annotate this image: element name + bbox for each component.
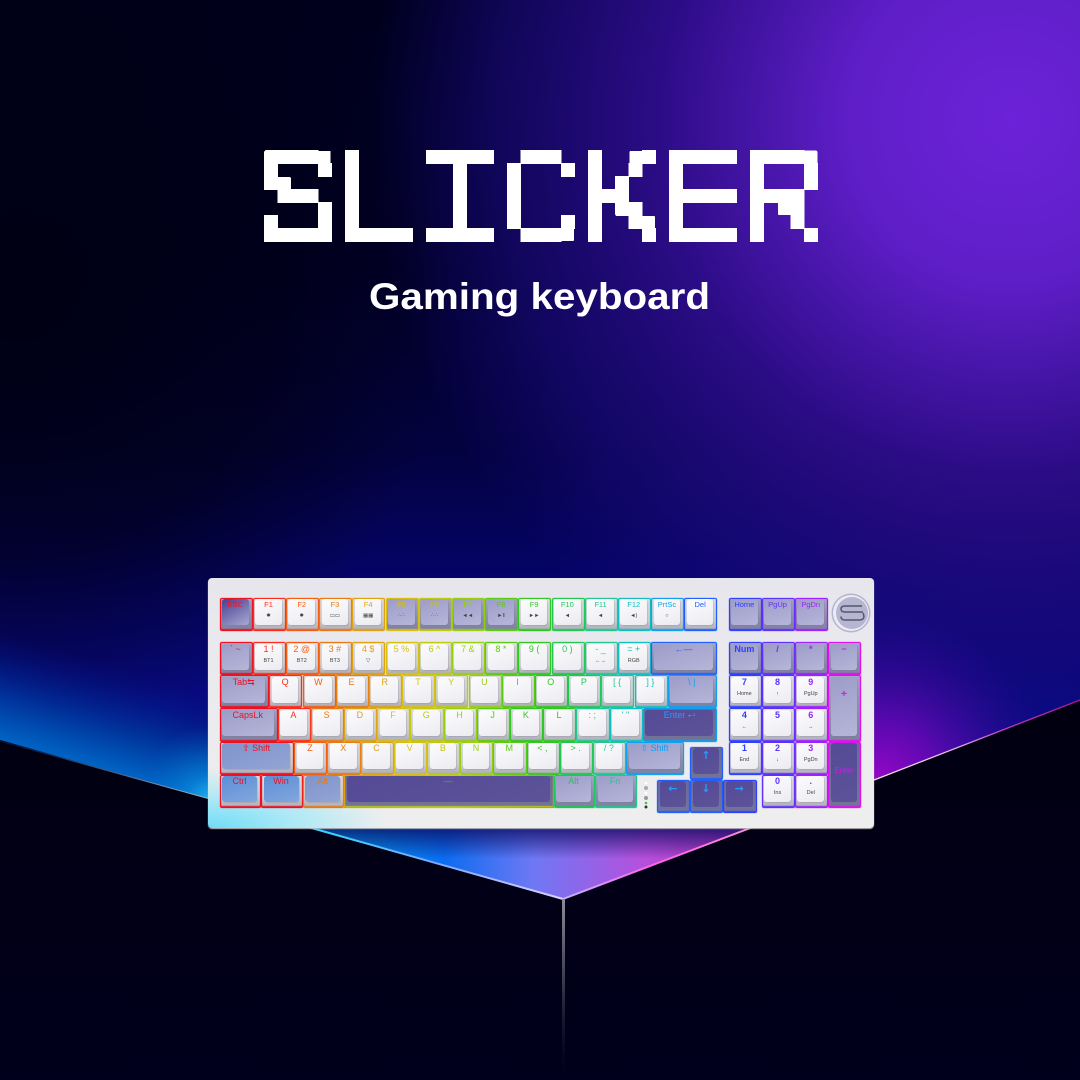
function key row: ◄ <box>598 613 603 619</box>
numeric keypad: 0 <box>775 776 780 786</box>
shift key row: ⇧ Shift <box>640 743 669 753</box>
function key row: ◄ <box>565 613 570 619</box>
number key row: BT1 <box>263 658 274 664</box>
bottom key row <box>219 774 638 809</box>
numeric keypad: 2 <box>775 743 780 753</box>
number key row: 7 & <box>461 644 474 654</box>
number key row: ←— <box>675 644 693 654</box>
home key row: A <box>290 710 296 720</box>
shift key row: X <box>340 743 346 753</box>
home key row: F <box>390 710 396 720</box>
arrow key cluster: ↑ <box>701 749 711 762</box>
number key row: BT3 <box>330 658 340 664</box>
numeric keypad: Num <box>734 644 754 654</box>
shift key row: N <box>473 743 479 753</box>
function key row: ◄) <box>630 613 637 619</box>
number key row: 6 ^ <box>429 644 440 654</box>
home key row: J <box>490 710 495 720</box>
number key row: 1 ! <box>264 644 274 654</box>
function key row: F6 <box>430 600 439 609</box>
number key row: ` ~ <box>230 644 241 654</box>
home key row: G <box>423 710 430 720</box>
QWERTY key row: Tab⇆ <box>233 677 255 687</box>
numeric keypad: Ins <box>774 790 781 796</box>
QWERTY key row: O <box>547 677 554 687</box>
shift key row: ⇧ Shift <box>242 743 270 753</box>
function key row: F3 <box>331 600 339 609</box>
QWERTY key row: Y <box>448 677 454 687</box>
keyboard body <box>208 578 874 828</box>
home key row: L <box>557 710 562 720</box>
shift key row <box>219 742 685 776</box>
function key row: ∴∴ <box>398 613 405 619</box>
number key row: 4 $ <box>362 644 374 654</box>
function key row: F2 <box>297 600 306 609</box>
number key row: 9 ( <box>529 644 539 654</box>
numeric keypad: 5 <box>775 710 780 720</box>
QWERTY key row <box>219 674 718 708</box>
number key row <box>219 641 718 676</box>
QWERTY key row: W <box>314 677 323 687</box>
function key row: PrtSc <box>658 600 676 609</box>
bottom key row: Alt <box>568 776 579 786</box>
QWERTY key row: U <box>481 677 488 687</box>
number key row: 5 % <box>394 644 409 654</box>
shift key row: M <box>505 743 513 753</box>
numeric keypad: − <box>841 644 847 654</box>
function key row: ◄◄ <box>462 613 473 619</box>
home key row: : ; <box>588 710 596 720</box>
QWERTY key row: T <box>415 677 421 687</box>
number key row: 2 @ <box>293 644 310 654</box>
function key row: ∴∴ <box>431 613 438 619</box>
QWERTY key row: R <box>381 677 388 687</box>
numeric keypad: 6 <box>808 710 813 720</box>
title: SLICKER in pixel style: SLICKER <box>255 127 826 286</box>
numeric keypad: Enter <box>834 766 854 775</box>
numeric keypad: ← <box>742 724 747 730</box>
function key row: ►► <box>529 613 540 619</box>
shift key row: C <box>373 743 380 753</box>
QWERTY key row: \ | <box>688 677 696 687</box>
function key row: F10 <box>561 600 574 609</box>
home key row: D <box>357 710 363 720</box>
status indicator lights <box>644 782 648 808</box>
function key row: ESC <box>228 600 243 609</box>
numeric keypad: 3 <box>808 743 813 753</box>
QWERTY key row: [ { <box>613 677 621 687</box>
home key row: H <box>456 710 463 720</box>
numeric keypad: 4 <box>742 710 747 720</box>
number key row: 0 ) <box>562 644 573 654</box>
number key row: 8 * <box>495 644 506 654</box>
number key row: ▽ <box>366 658 370 664</box>
arrow key cluster: ← <box>668 782 677 795</box>
shift key row: Z <box>307 743 313 753</box>
numeric keypad: PgDn <box>804 757 818 763</box>
icon: rotary knob with logo <box>832 594 870 632</box>
function key row: F7 <box>463 600 472 609</box>
shift key row: < , <box>537 743 548 753</box>
shift key row: > . <box>570 743 581 753</box>
number key row: RGB <box>628 658 640 664</box>
function key row: F12 <box>627 600 640 609</box>
function key row: F4 <box>364 600 373 609</box>
shift key row: / ? <box>604 743 614 753</box>
numeric keypad: + <box>841 689 847 700</box>
function key row: ▭▭ <box>330 613 340 619</box>
bottom key row: Fn <box>610 776 620 786</box>
QWERTY key row: P <box>581 677 587 687</box>
numeric keypad: End <box>739 757 749 763</box>
home key row: K <box>523 710 529 720</box>
subtitle: Gaming keyboard: Gaming keyboard <box>369 276 710 317</box>
numeric keypad: ↓ <box>776 757 779 763</box>
numeric keypad: 1 <box>742 743 747 753</box>
function key row: ✹ <box>266 613 271 619</box>
function key row: ▦▦ <box>363 613 373 619</box>
shift key row: B <box>440 743 446 753</box>
arrow key cluster <box>656 746 758 814</box>
numeric keypad: 7 <box>742 677 747 687</box>
function key row: F5 <box>397 600 406 609</box>
numeric keypad: * <box>809 644 812 654</box>
function key row: ►‖ <box>497 613 505 619</box>
numeric keypad: PgUp <box>804 691 818 697</box>
numeric keypad: 8 <box>775 677 780 687</box>
numeric keypad: / <box>776 644 779 654</box>
number key row: BT2 <box>297 658 307 664</box>
function key row: ○ <box>665 613 669 619</box>
arrow key cluster: → <box>735 782 744 795</box>
numeric keypad: ↑ <box>776 691 779 697</box>
navigation key row: Home <box>734 600 754 609</box>
function key row <box>219 597 718 632</box>
number key row: = + <box>627 644 640 654</box>
numeric keypad: Del <box>807 790 815 796</box>
QWERTY key row: E <box>349 677 355 687</box>
home key row: CapsLk <box>233 710 263 720</box>
navigation key row <box>728 597 829 632</box>
bottom key row: Win <box>273 776 289 786</box>
QWERTY key row: ] } <box>646 677 654 687</box>
bottom key row: Ctrl <box>232 776 246 786</box>
arrow key cluster: ↓ <box>701 782 711 795</box>
function key row: F1 <box>264 600 273 609</box>
bottom key row: Alt <box>317 776 328 786</box>
home key row: S <box>324 710 330 720</box>
numeric keypad: 9 <box>808 677 813 687</box>
home key row: Enter ⮠ <box>664 710 695 720</box>
function key row: F9 <box>530 600 539 609</box>
numeric keypad: Home <box>737 691 752 697</box>
number key row: 3 # <box>329 644 341 654</box>
shift key row: V <box>407 743 413 753</box>
navigation key row: PgDn <box>801 600 820 609</box>
QWERTY key row: I <box>516 677 519 687</box>
numeric keypad: → <box>808 724 813 730</box>
number key row: - _ <box>595 644 606 654</box>
function key row: ✹ <box>299 613 304 619</box>
function key row: F11 <box>594 600 607 609</box>
QWERTY key row: Q <box>282 677 289 687</box>
bottom key row: — <box>444 776 452 786</box>
numeric keypad: . <box>809 776 812 786</box>
number key row: ←→ <box>595 658 606 664</box>
home key row: ' " <box>622 710 629 720</box>
navigation key row: PgUp <box>768 600 787 609</box>
function key row: Del <box>694 600 706 609</box>
home key row <box>219 707 718 743</box>
numeric keypad <box>728 641 862 809</box>
function key row: F8 <box>497 600 505 609</box>
